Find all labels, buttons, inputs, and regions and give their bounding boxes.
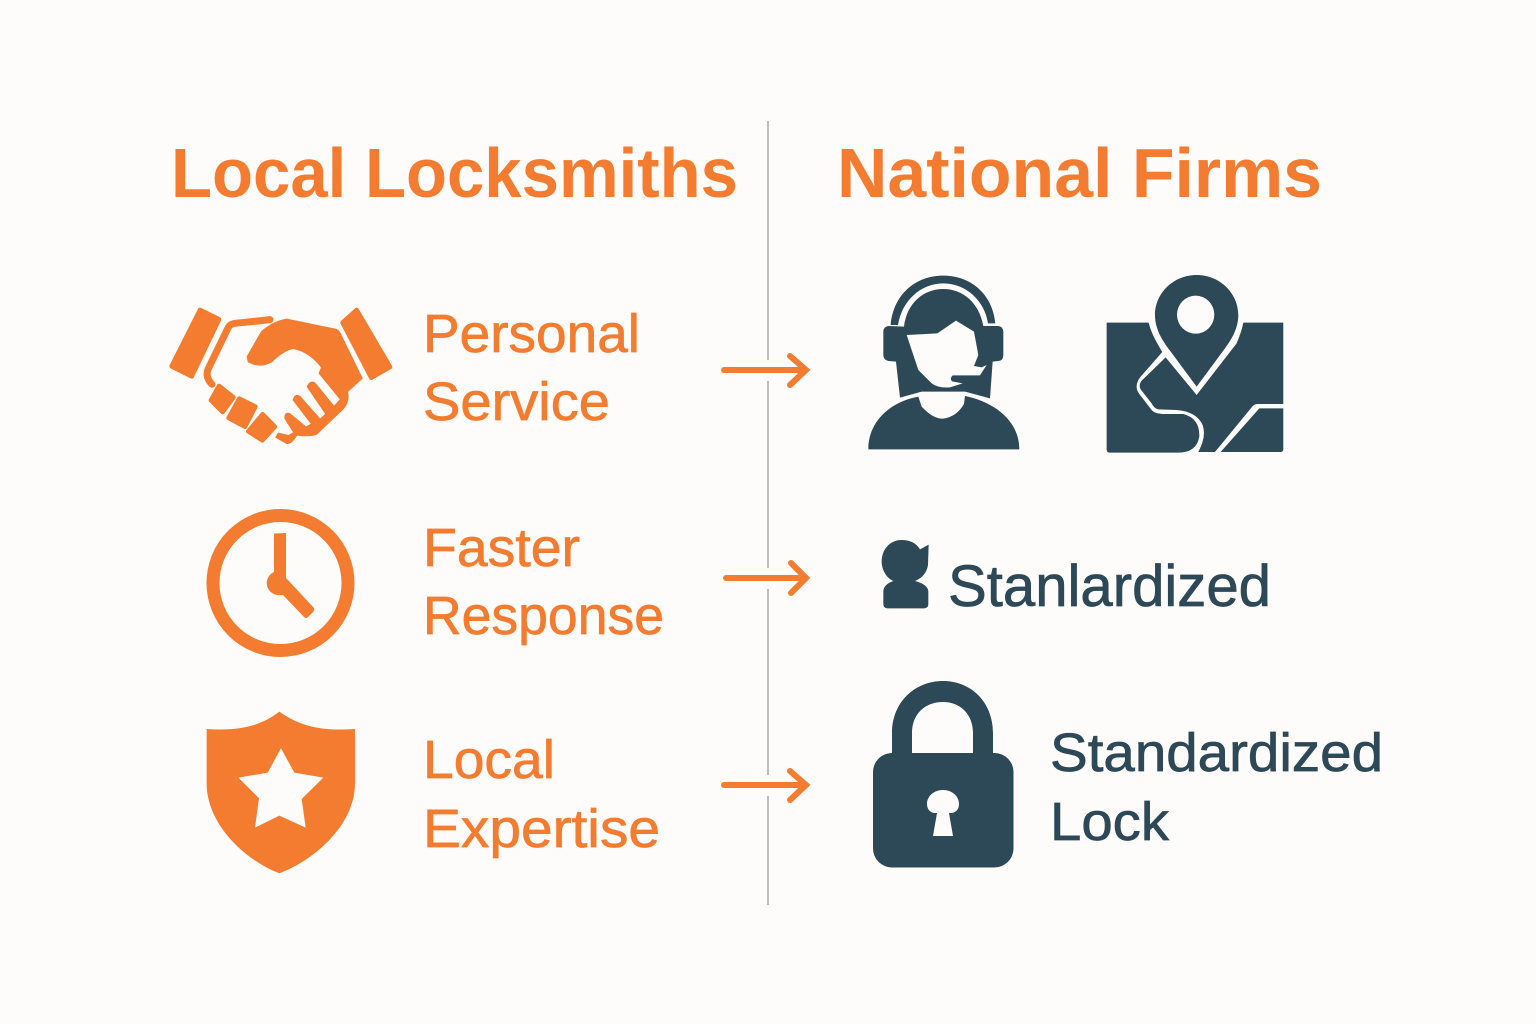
heading: Local Locksmiths: Local Locksmiths: [171, 134, 738, 212]
icon: handshake: [172, 310, 390, 443]
text: Local Expertise: Expertise: [423, 799, 660, 859]
text: Local Expertise: [423, 730, 660, 859]
text: Standardized Lock: Standardized: [1050, 723, 1383, 783]
icon: headset agent: [868, 276, 1019, 449]
icon: padlock: [873, 681, 1014, 868]
arrow: faster response to standardized: [726, 563, 806, 593]
text: Personal Service: Service: [423, 372, 610, 432]
arrow: local expertise to standardized lock: [724, 771, 806, 800]
icon: shield with star: [207, 712, 355, 873]
text: Personal Service: Personal: [423, 304, 640, 364]
text: Standardized Lock: [1050, 723, 1383, 852]
heading: National Firms: National Firms: [837, 134, 1322, 212]
text: Faster Response: Faster: [423, 518, 580, 578]
text: Stanlardized: Stanlardized: [948, 554, 1271, 619]
text: Personal Service: [423, 304, 640, 432]
icon: generic person: [882, 540, 929, 608]
icon: clock: [213, 516, 348, 650]
text: Faster Response: [423, 518, 664, 646]
text: Local Expertise: Local: [423, 730, 555, 790]
icon: map with location pin: [1107, 275, 1283, 453]
text: Standardized Lock: Lock: [1050, 792, 1170, 852]
arrow: personal service to support: [724, 356, 806, 385]
text: Faster Response: Response: [423, 586, 664, 646]
